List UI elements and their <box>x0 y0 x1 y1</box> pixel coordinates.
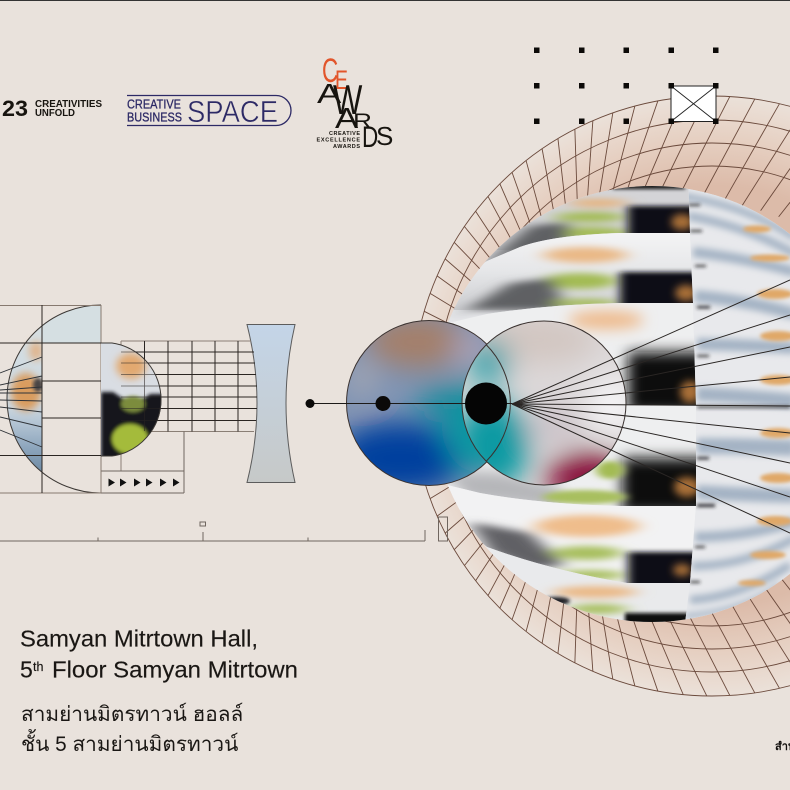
logo: creative business space: CREATIVE <box>127 96 181 112</box>
lens circle A <box>346 320 487 486</box>
logo: creative excellence awards: EXCELLENCE <box>316 138 360 144</box>
venue text thai: สามย่านมิตรทาวน์ ฮอลล์ <box>21 702 243 726</box>
logo: creative excellence awards: R <box>353 109 372 133</box>
logo: creative excellence awards: C <box>322 52 338 90</box>
logo: creative business space: SPACE <box>187 94 278 129</box>
striped sphere <box>448 186 790 622</box>
logo: creativities unfold: 23 <box>2 96 28 121</box>
perspective grid dome <box>412 93 790 699</box>
logo: creativities unfold <box>2 96 102 121</box>
logo: creativities unfold: CREATIVITIES <box>35 99 102 110</box>
half disc, large <box>0 305 112 493</box>
venue text english: Samyan Mitrtown Hall, <box>20 626 258 652</box>
venue text thai <box>21 702 243 756</box>
lens circle B <box>462 320 626 486</box>
logo: creative excellence awards: S <box>376 121 393 151</box>
logo: creative business space <box>127 94 291 129</box>
dot matrix and crossed box <box>534 48 718 124</box>
logo: creative excellence awards: A <box>335 102 359 134</box>
logo: creative excellence awards: AWARDS <box>333 144 360 150</box>
grid block <box>101 341 257 493</box>
logo: creative excellence awards <box>316 52 393 154</box>
half disc, small with blurred image <box>101 342 162 456</box>
venue text english: Floor Samyan Mitrtown <box>52 656 298 682</box>
venue text english: 5 <box>20 656 33 682</box>
ruler <box>0 517 448 541</box>
logo: creative business space: BUSINESS <box>127 110 182 124</box>
logo: creativities unfold: UNFOLD <box>35 108 75 119</box>
fan of ray lines over sphere <box>512 280 790 533</box>
concave lens <box>247 324 295 482</box>
logo: creative excellence awards: E <box>335 65 348 95</box>
logo: creative excellence awards: D <box>362 120 378 154</box>
optical axis with dots <box>306 382 512 424</box>
logo: creative excellence awards: A <box>317 78 342 109</box>
venue text english <box>20 626 298 682</box>
logo: creative excellence awards: W <box>333 76 362 123</box>
venue text english: th <box>33 660 43 674</box>
venue text thai: ชั้น 5 สามย่านมิตรทาวน์ <box>21 729 239 756</box>
logo: creative excellence awards: CREATIVE <box>329 131 360 137</box>
arrow row <box>108 478 180 486</box>
